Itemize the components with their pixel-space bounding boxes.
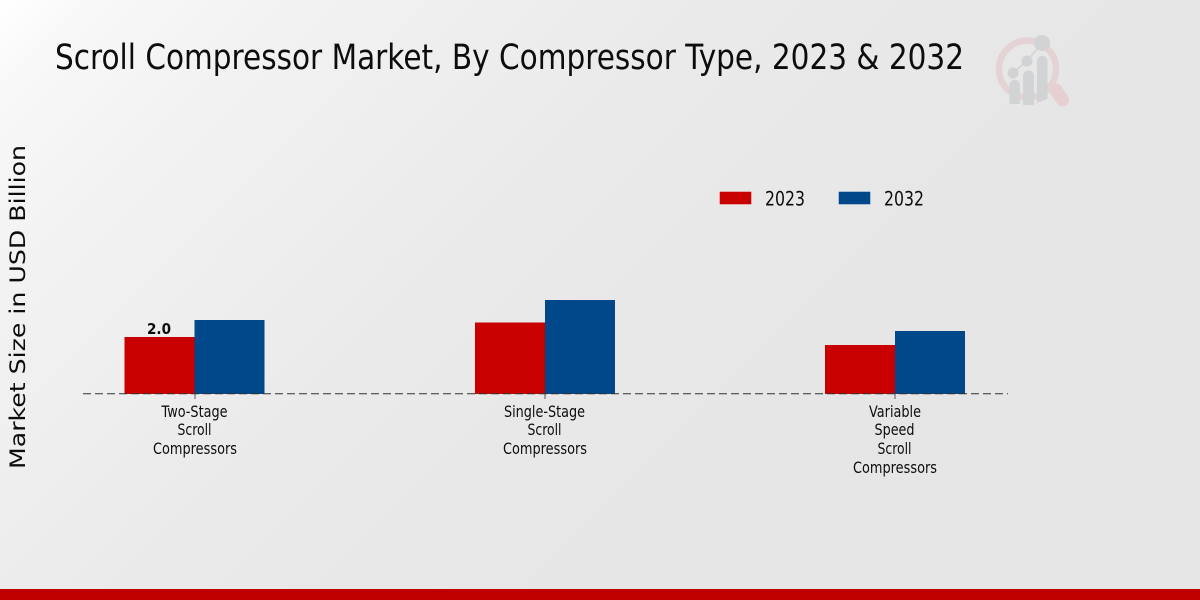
category label: Two-Stage bbox=[153, 402, 237, 458]
category label: Variable Speed: Variable bbox=[869, 402, 921, 421]
bars: Two-Stage bbox=[124, 320, 264, 394]
y axis label: Market Size in USD Billion bbox=[6, 145, 31, 469]
bars: Variable Speed bbox=[825, 331, 965, 394]
bars: Single-Stage bbox=[475, 300, 615, 394]
category label: Two-Stage: Two-Stage bbox=[161, 402, 228, 421]
title: Scroll Compressor Market, By Compressor Type, 2023 & 2032 bbox=[55, 38, 964, 78]
category label: Variable Speed bbox=[853, 402, 937, 477]
legend: 2023 bbox=[720, 188, 805, 210]
category label: Two-Stage: Compressors bbox=[153, 439, 237, 458]
category label: Single-Stage bbox=[503, 402, 587, 458]
bar chart bbox=[83, 300, 1008, 477]
legend: 2023: 2023 bbox=[765, 188, 805, 210]
legend: 2032: 2032 bbox=[884, 188, 924, 210]
category label: Two-Stage: Scroll bbox=[178, 420, 212, 439]
axis baseline bbox=[83, 394, 1008, 399]
legend: 2032 bbox=[838, 188, 924, 210]
icon: logo watermark bbox=[999, 35, 1062, 105]
category label: Single-Stage: Single-Stage bbox=[504, 402, 585, 421]
legend bbox=[720, 188, 924, 210]
category label: Single-Stage: Scroll bbox=[528, 420, 562, 439]
category label: Variable Speed: Speed bbox=[874, 420, 914, 439]
value label: 2.0 bbox=[147, 320, 171, 338]
category label: Single-Stage: Compressors bbox=[503, 439, 587, 458]
category label: Variable Speed: Compressors bbox=[853, 458, 937, 477]
footer bar bbox=[0, 589, 1200, 600]
category label: Variable Speed: Scroll bbox=[878, 439, 912, 458]
